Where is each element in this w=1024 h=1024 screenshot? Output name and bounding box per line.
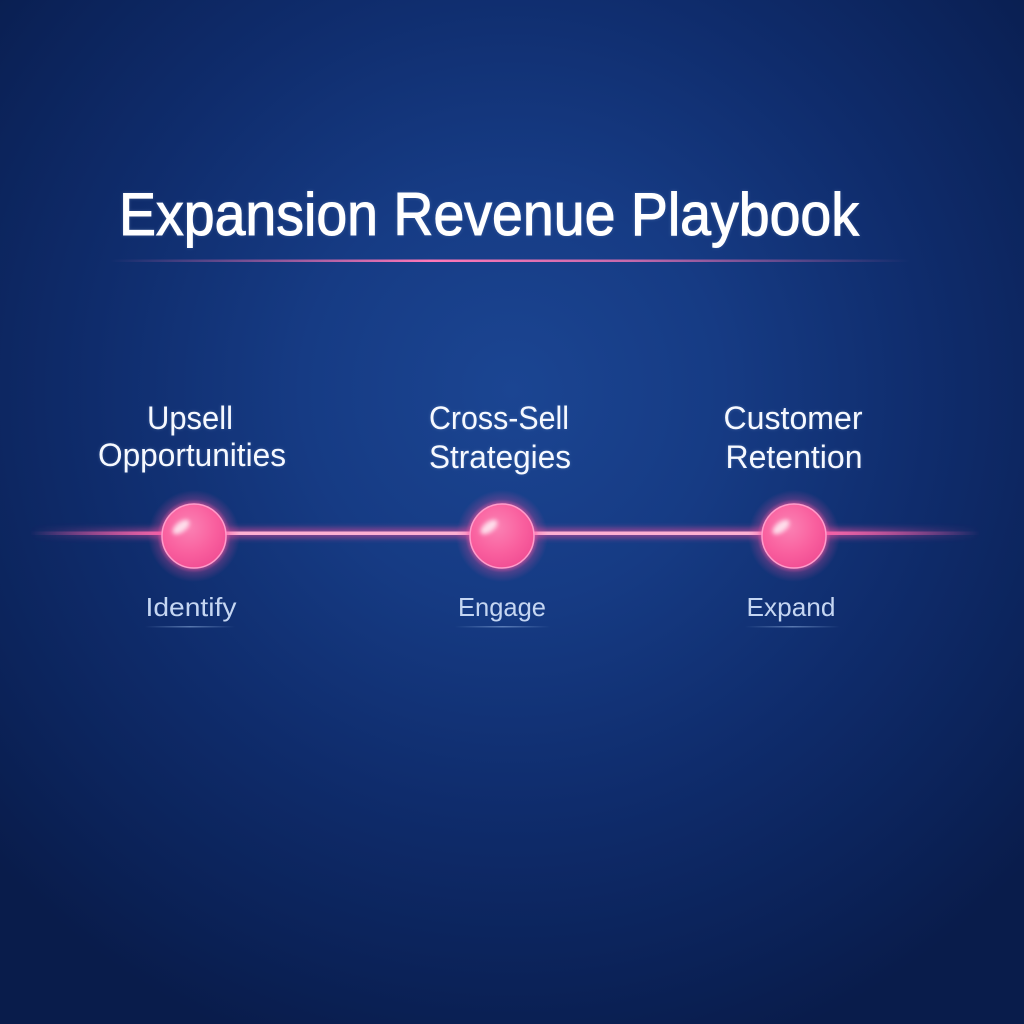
node — [456, 490, 548, 582]
label: Cross-Sell Strategies: Cross-Sell — [429, 400, 569, 436]
sublabel: Engage: Engage — [458, 592, 546, 622]
label: Customer Retention: Customer — [724, 400, 863, 436]
label: Upsell Opportunities: Opportunities — [98, 437, 286, 473]
step: Cross-Sell Strategies — [429, 400, 571, 628]
step: Customer Retention — [724, 400, 863, 628]
node — [748, 490, 840, 582]
title underline — [110, 260, 910, 262]
label: Customer Retention: Retention — [726, 439, 862, 475]
label: Cross-Sell Strategies: Strategies — [429, 439, 571, 475]
sublabel: Identify: Identify — [146, 592, 236, 622]
node — [148, 490, 240, 582]
step: Upsell Opportunities — [98, 400, 286, 628]
label: Upsell Opportunities: Upsell — [147, 400, 233, 436]
sublabel: Expand: Expand — [746, 592, 836, 622]
timeline — [30, 528, 980, 538]
title: Expansion Revenue Playbook — [119, 181, 860, 248]
